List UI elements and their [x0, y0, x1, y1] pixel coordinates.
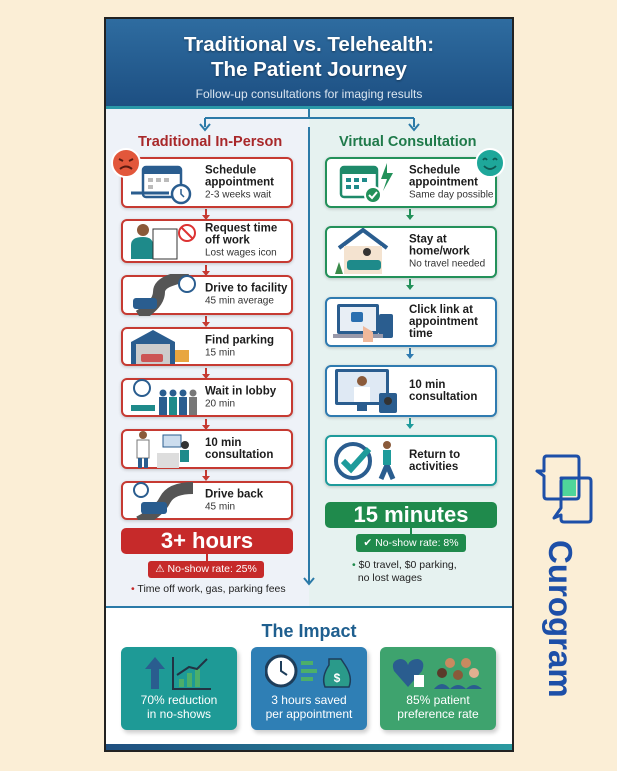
card: schedule (virtual): appointment: [409, 176, 478, 188]
card: schedule (traditional): 2-3 weeks wait: [205, 189, 271, 200]
icon: angry face: [111, 148, 140, 178]
impact card: preference: 85% patient: [406, 693, 470, 707]
card: schedule (traditional): [121, 157, 293, 208]
brand name: Curogram: [542, 540, 579, 698]
main panel: [104, 17, 514, 752]
card: find parking: Find parking: [205, 334, 274, 346]
total: 15 minutes: [325, 502, 497, 528]
card: stay at home: home/work: [409, 246, 470, 258]
heading: the impact: The Impact: [261, 621, 357, 641]
impact card: hours saved: per appointment: [266, 707, 352, 721]
note: traditional costs: • Time off work, gas, parking fees: [131, 583, 286, 595]
badge: no-show 25%: ⚠ No-show rate: 25%: [155, 563, 257, 575]
impact card: preference: [380, 647, 496, 730]
card: request time off: Request time: [205, 222, 277, 234]
card: drive to facility: [121, 275, 293, 315]
card: stay at home: [325, 226, 497, 278]
card: wait in lobby: [121, 378, 293, 417]
card: return to activities: activities: [409, 460, 458, 472]
card: consultation (traditional): [121, 429, 293, 469]
card: consultation (virtual): [325, 365, 497, 417]
card: stay at home: No travel needed: [409, 258, 485, 270]
card: find parking: 15 min: [205, 347, 235, 358]
card: consultation (traditional): 10 min: [205, 437, 241, 449]
header: [106, 19, 512, 109]
title: [183, 33, 434, 82]
card: request time off: Lost wages icon: [205, 248, 277, 258]
badge: no-show 8%: [356, 534, 466, 552]
card: drive back: Drive back: [205, 488, 263, 500]
card: stay at home: Stay at: [409, 234, 447, 246]
note: virtual savings: no lost wages: [358, 572, 422, 584]
impact card: no-shows: in no-shows: [147, 707, 211, 721]
card: request time off: off work: [205, 234, 250, 246]
card: click link: appointment time: [409, 316, 478, 340]
impact card: hours saved: 3 hours saved: [271, 693, 347, 707]
left arrows: [202, 209, 210, 481]
split arrows: [199, 109, 420, 586]
subtitle: Follow-up consultations for imaging results: [196, 87, 422, 101]
impact card: hours saved: $: [334, 671, 341, 685]
title: Traditional vs. Telehealth:: [184, 33, 434, 56]
card: click link: Click link at: [409, 304, 473, 316]
card: schedule (traditional): Schedule: [205, 164, 256, 176]
badge: no-show 25%: [148, 561, 264, 578]
card: drive back: [121, 481, 293, 520]
card: drive back: 45 min: [205, 501, 235, 512]
icon: smiley face: [476, 148, 505, 178]
icon: chat bubbles: [535, 454, 592, 524]
card: request time off: [121, 219, 293, 263]
total: 3+ hours: [121, 528, 293, 554]
card: schedule (virtual): [325, 157, 497, 208]
card: schedule (virtual): Schedule: [409, 164, 460, 176]
impact card: hours saved: [251, 647, 367, 730]
card: click link: [325, 297, 497, 347]
badge: no-show 8%: ✔ No-show rate: 8%: [363, 537, 459, 549]
impact section: [106, 606, 512, 750]
card: consultation (virtual): consultation: [409, 391, 477, 403]
impact card: preference: preference rate: [397, 707, 479, 721]
card: schedule (virtual): Same day possible: [409, 189, 494, 200]
card: consultation (virtual): 10 min: [409, 379, 445, 391]
card: schedule (traditional): appointment: [205, 176, 274, 188]
total: 15 minutes: 15 minutes: [354, 502, 468, 527]
card: drive to facility: Drive to facility: [205, 282, 287, 294]
card: return to activities: Return to: [409, 448, 460, 460]
card: find parking: [121, 327, 293, 366]
card: return to activities: [325, 435, 497, 486]
card: consultation (traditional): consultation: [205, 449, 273, 461]
heading: traditional: Traditional In-Person: [138, 134, 282, 150]
impact card: no-shows: 70% reduction: [141, 693, 217, 707]
note: virtual savings: • $0 travel, $0 parking,: [352, 559, 457, 571]
card: wait in lobby: Wait in lobby: [205, 385, 276, 397]
heading: virtual: Virtual Consultation: [339, 134, 476, 150]
right arrows: [406, 209, 414, 429]
impact card: no-shows: [121, 647, 237, 730]
logo: Curogram: [535, 454, 592, 698]
note: virtual savings: [352, 559, 457, 584]
title: The Patient Journey: [211, 58, 407, 81]
total: 3+ hours: 3+ hours: [161, 528, 253, 553]
card: drive to facility: 45 min average: [205, 296, 274, 306]
card: wait in lobby: 20 min: [205, 398, 235, 409]
